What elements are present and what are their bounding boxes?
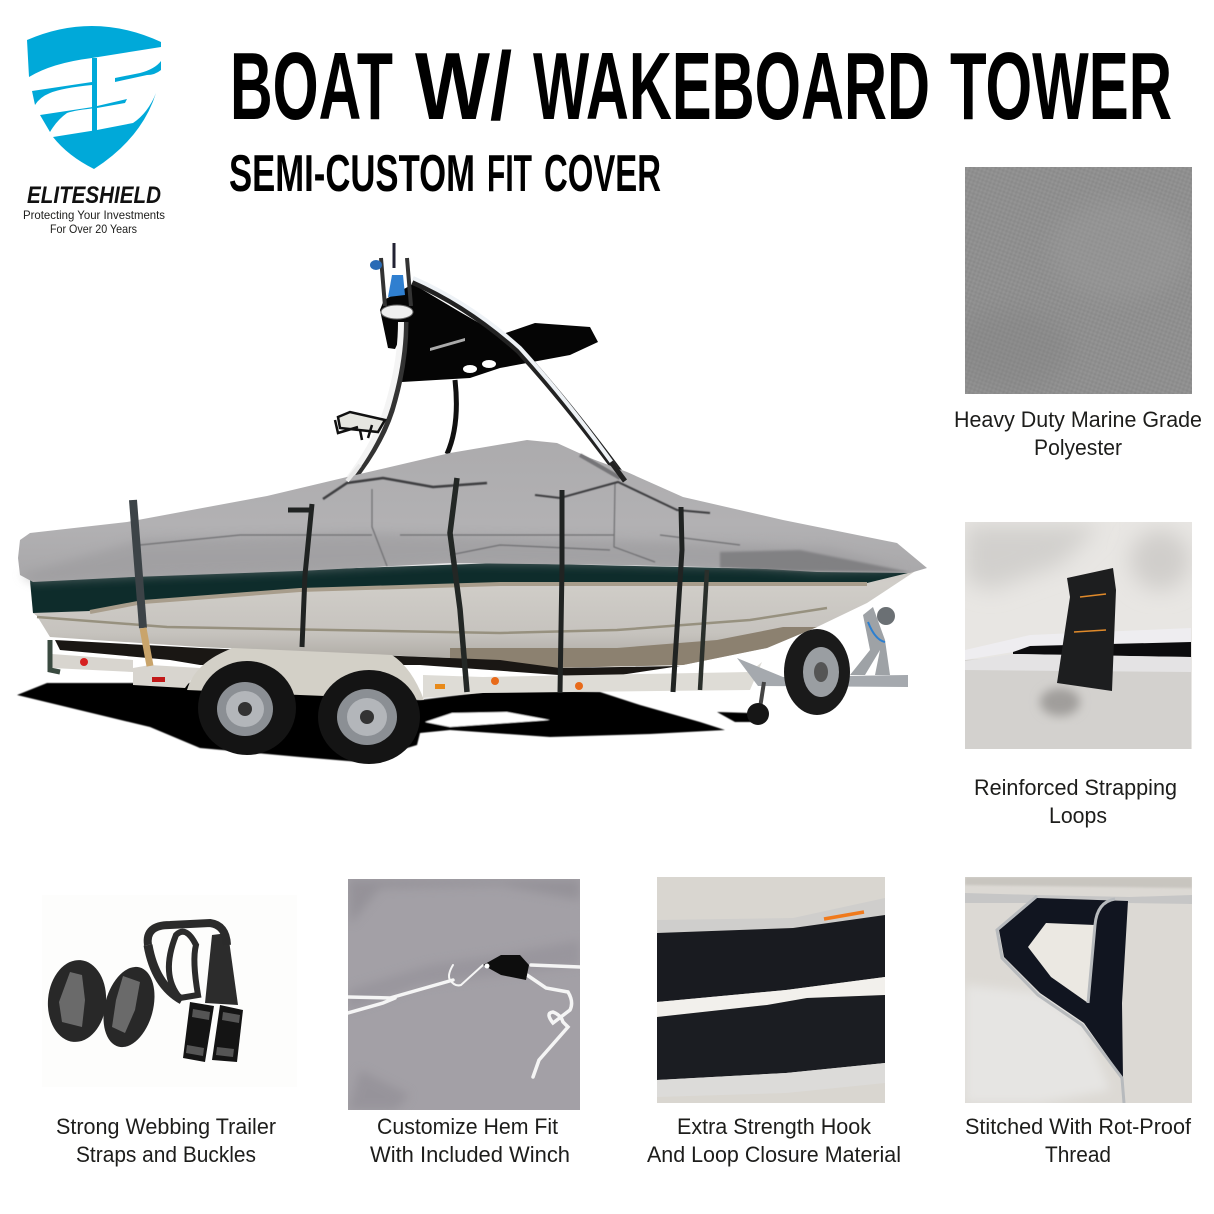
- caption: [370, 1114, 570, 1167]
- cover: seams and wrinkles: [140, 483, 740, 566]
- caption: Loops: [1049, 803, 1107, 828]
- caption: [965, 1114, 1192, 1167]
- trailer: lights: [80, 658, 583, 690]
- title: W/: [415, 33, 512, 140]
- panel: hem fit with winch: [348, 879, 580, 1167]
- hull: dark green stripe: [30, 563, 912, 613]
- tagline: For Over 20 Years: [50, 222, 137, 236]
- subtitle: COVER: [544, 145, 661, 203]
- hero image: covered boat on trailer with tower: [17, 243, 927, 764]
- photo: fabric swatch: [950, 167, 1192, 394]
- caption: [954, 407, 1202, 460]
- caption: Extra Strength Hook: [677, 1114, 872, 1139]
- brand name: ELITESHIELD: [27, 182, 161, 209]
- photo: stitched opening: [965, 877, 1192, 1103]
- panel: reinforced strapping loops: [965, 522, 1192, 828]
- ground shadow: [17, 683, 755, 762]
- caption: Stitched With Rot-Proof: [965, 1114, 1192, 1139]
- caption: With Included Winch: [370, 1142, 570, 1167]
- rack highlights: [430, 338, 496, 373]
- strap: B: [450, 478, 467, 692]
- caption: Reinforced Strapping: [974, 775, 1177, 800]
- panel: webbing trailer straps and buckles: [42, 895, 297, 1167]
- strap: A: [288, 504, 313, 647]
- boat cover: [18, 440, 927, 582]
- trailer: frame: [50, 607, 908, 698]
- wheel: rear tandem: [198, 661, 296, 755]
- panel: marine grade polyester: [950, 167, 1202, 460]
- caption: [647, 1114, 901, 1167]
- jack wheel: [747, 682, 769, 725]
- subtitle: FIT: [487, 145, 532, 203]
- tower feet: [347, 462, 625, 481]
- trailer: fender: [187, 648, 424, 700]
- hull: tan lower band: [450, 627, 817, 668]
- caption: Customize Hem Fit: [377, 1114, 558, 1139]
- caption: Heavy Duty Marine Grade: [954, 407, 1202, 432]
- tower: rear support: [447, 380, 456, 454]
- photo: straps and buckles: [42, 895, 297, 1087]
- caption: Straps and Buckles: [76, 1142, 256, 1167]
- subtitle: SEMI-CUSTOM: [229, 145, 475, 203]
- wheel: front tandem: [318, 670, 420, 764]
- title: [230, 33, 1172, 140]
- caption: And Loop Closure Material: [647, 1142, 901, 1167]
- icon: blue shield: [27, 26, 161, 169]
- tower: top fittings: [370, 243, 413, 319]
- strap: E: [700, 570, 707, 690]
- tagline: [23, 208, 165, 236]
- tagline: Protecting Your Investments: [23, 208, 165, 222]
- caption: Thread: [1045, 1142, 1111, 1167]
- photo: strap loop: [965, 522, 1192, 749]
- strap: D: [673, 507, 682, 692]
- hull: tan pin stripe: [90, 584, 867, 612]
- logo: EliteShield shield and tagline: [23, 26, 165, 236]
- under-hull shadow: [55, 640, 680, 678]
- panel: hook and loop closure: [647, 877, 901, 1167]
- caption: [974, 775, 1177, 828]
- panel: rot-proof thread: [965, 877, 1192, 1167]
- title: BOAT: [230, 33, 393, 140]
- wheels: [198, 629, 850, 764]
- strap: C: [560, 490, 562, 693]
- title: WAKEBOARD: [533, 33, 930, 140]
- caption: [56, 1114, 276, 1167]
- caption: Polyester: [1034, 435, 1122, 460]
- photo: velcro strips: [657, 877, 885, 1103]
- straps: [133, 478, 707, 693]
- strap: stern post: [133, 500, 150, 666]
- caption: Strong Webbing Trailer: [56, 1114, 276, 1139]
- hull: [30, 565, 917, 668]
- tower: chrome arch: [413, 278, 625, 481]
- hull: rub rail: [37, 608, 827, 633]
- photo: grey cover with rope and cleat: [348, 879, 580, 1110]
- tower: board rack clamp: [335, 412, 385, 440]
- tower: black wakeboard rack: [380, 284, 598, 382]
- wheel: single: [784, 629, 850, 715]
- cover: skirt shading: [20, 533, 905, 582]
- tower: chrome front leg: [347, 322, 404, 482]
